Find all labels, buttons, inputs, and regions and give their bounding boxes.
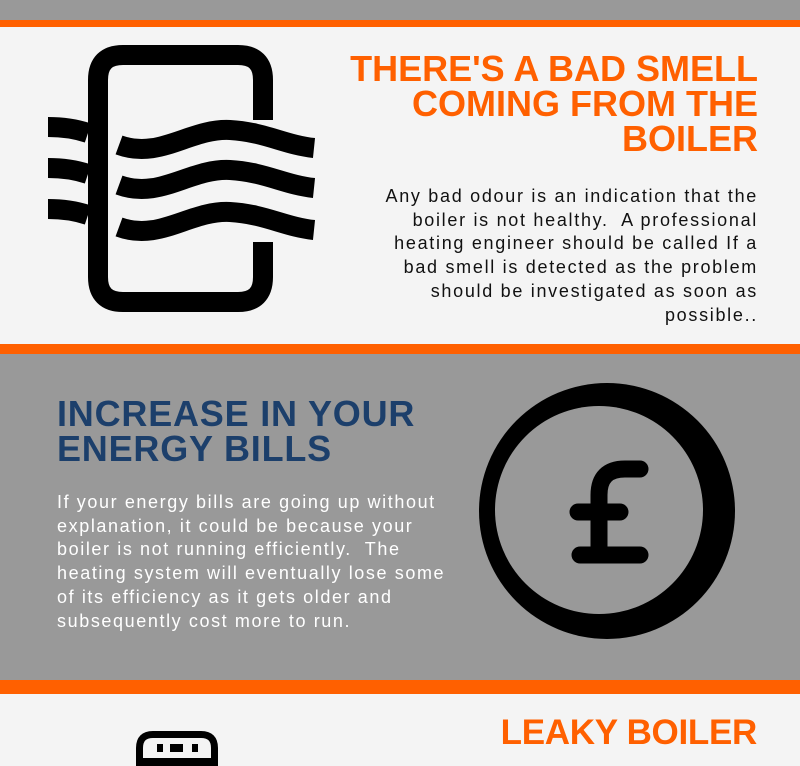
- text: energy bills body: explanation, it could be because your: [57, 516, 413, 536]
- heading: bad smell: THERE'S A BAD SMELL: [350, 48, 758, 89]
- heading: energy bills: INCREASE IN YOUR: [57, 393, 415, 434]
- text: energy bills body: boiler is not running efficiently. The: [57, 539, 401, 559]
- heading: bad smell: BOILER: [622, 118, 758, 159]
- panel: bad smell: [48, 45, 758, 325]
- panel: energy bills: [57, 383, 735, 639]
- text: bad smell body: heating engineer should be called If a: [394, 233, 758, 253]
- text: bad smell body: boiler is not healthy. A professional: [413, 210, 758, 230]
- heading: bad smell: COMING FROM THE: [412, 83, 758, 124]
- icon: boiler: [136, 731, 218, 766]
- text: energy bills body: If your energy bills are going up without: [57, 492, 436, 512]
- icon: pound coin: [479, 383, 735, 639]
- heading: energy bills: [57, 393, 415, 469]
- text: bad smell body: bad smell is detected as the problem: [404, 257, 758, 277]
- heading: bad smell: [350, 48, 758, 159]
- text: energy bills body: heating system will eventually lose some: [57, 563, 445, 583]
- heading: leaky boiler: LEAKY BOILER: [501, 713, 757, 752]
- text: energy bills body: subsequently cost more to run.: [57, 611, 351, 631]
- text: bad smell body: possible..: [665, 305, 758, 325]
- icon: boiler with waves: [48, 45, 315, 312]
- text: energy bills body: [57, 492, 445, 631]
- text: energy bills body: of its efficiency as it gets older and: [57, 587, 393, 607]
- heading: energy bills: ENERGY BILLS: [57, 428, 332, 469]
- text: bad smell body: should be investigated as soon as: [431, 281, 758, 301]
- text: bad smell body: Any bad odour is an indication that the: [385, 186, 758, 206]
- text: bad smell body: [385, 186, 758, 325]
- panel: leaky boiler: [136, 713, 757, 766]
